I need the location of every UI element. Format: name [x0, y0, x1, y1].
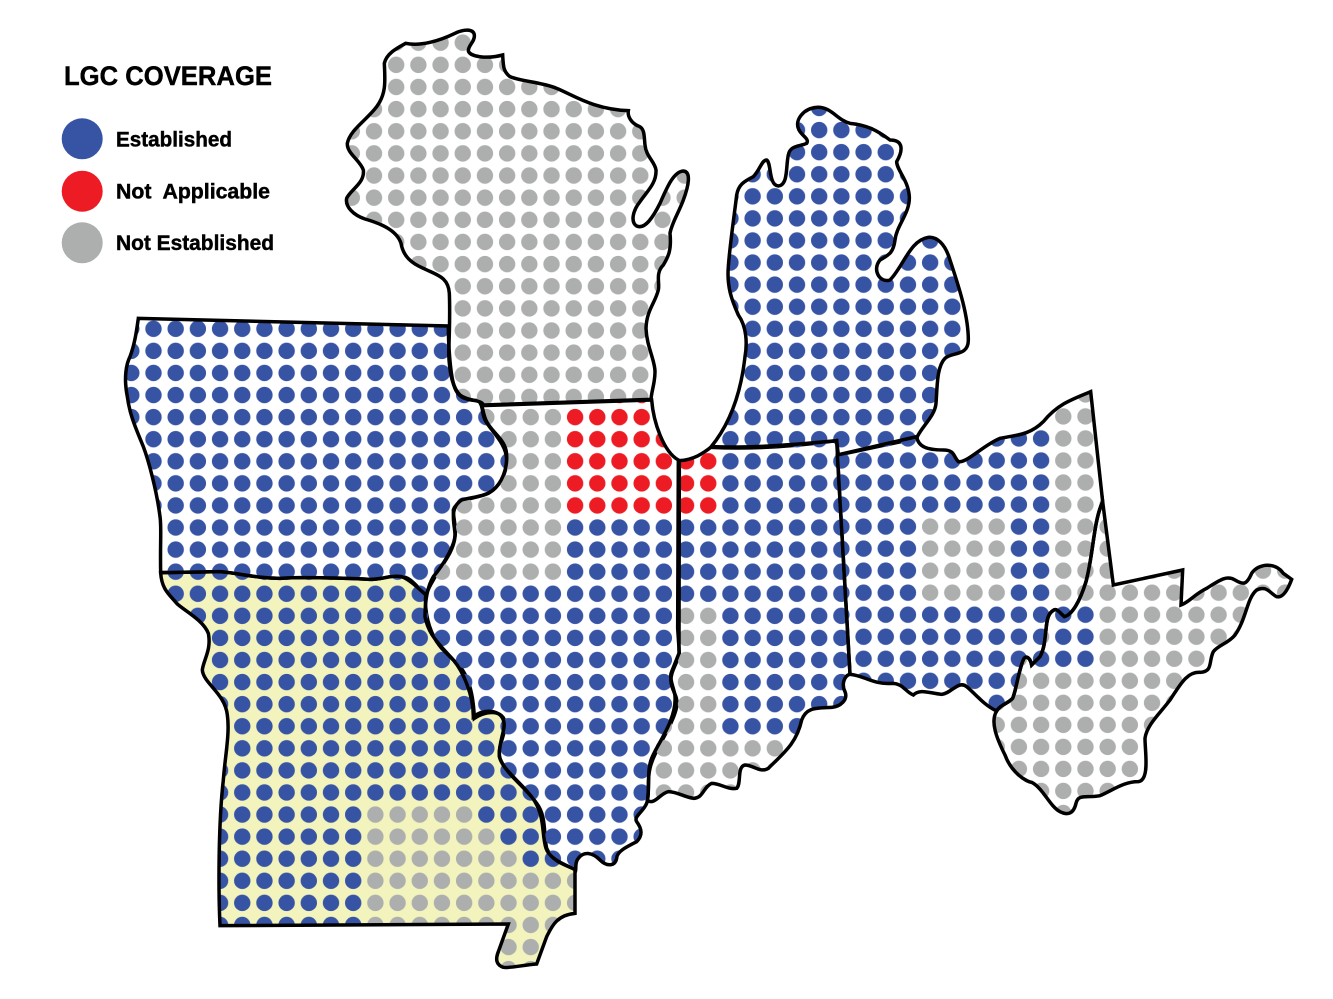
- state: wisconsin: [340, 20, 700, 420]
- state: illinois: [423, 398, 682, 873]
- state: missouri: [150, 570, 600, 980]
- state: indiana: [645, 438, 852, 804]
- legend item: not applicable: Not Applicable: [116, 180, 270, 204]
- legend item: not established: [62, 222, 274, 263]
- state: iowa: [120, 310, 520, 600]
- legend item: established: [62, 118, 232, 159]
- state: michigan: [708, 106, 970, 455]
- legend: [62, 61, 274, 263]
- legend item: established: Established: [116, 128, 232, 152]
- state: ohio: [836, 389, 1104, 714]
- legend item: not established: Not Established: [116, 232, 274, 255]
- legend title: LGC COVERAGE: [64, 61, 272, 91]
- state: west virginia: [992, 496, 1294, 816]
- legend item: not applicable: [62, 171, 270, 212]
